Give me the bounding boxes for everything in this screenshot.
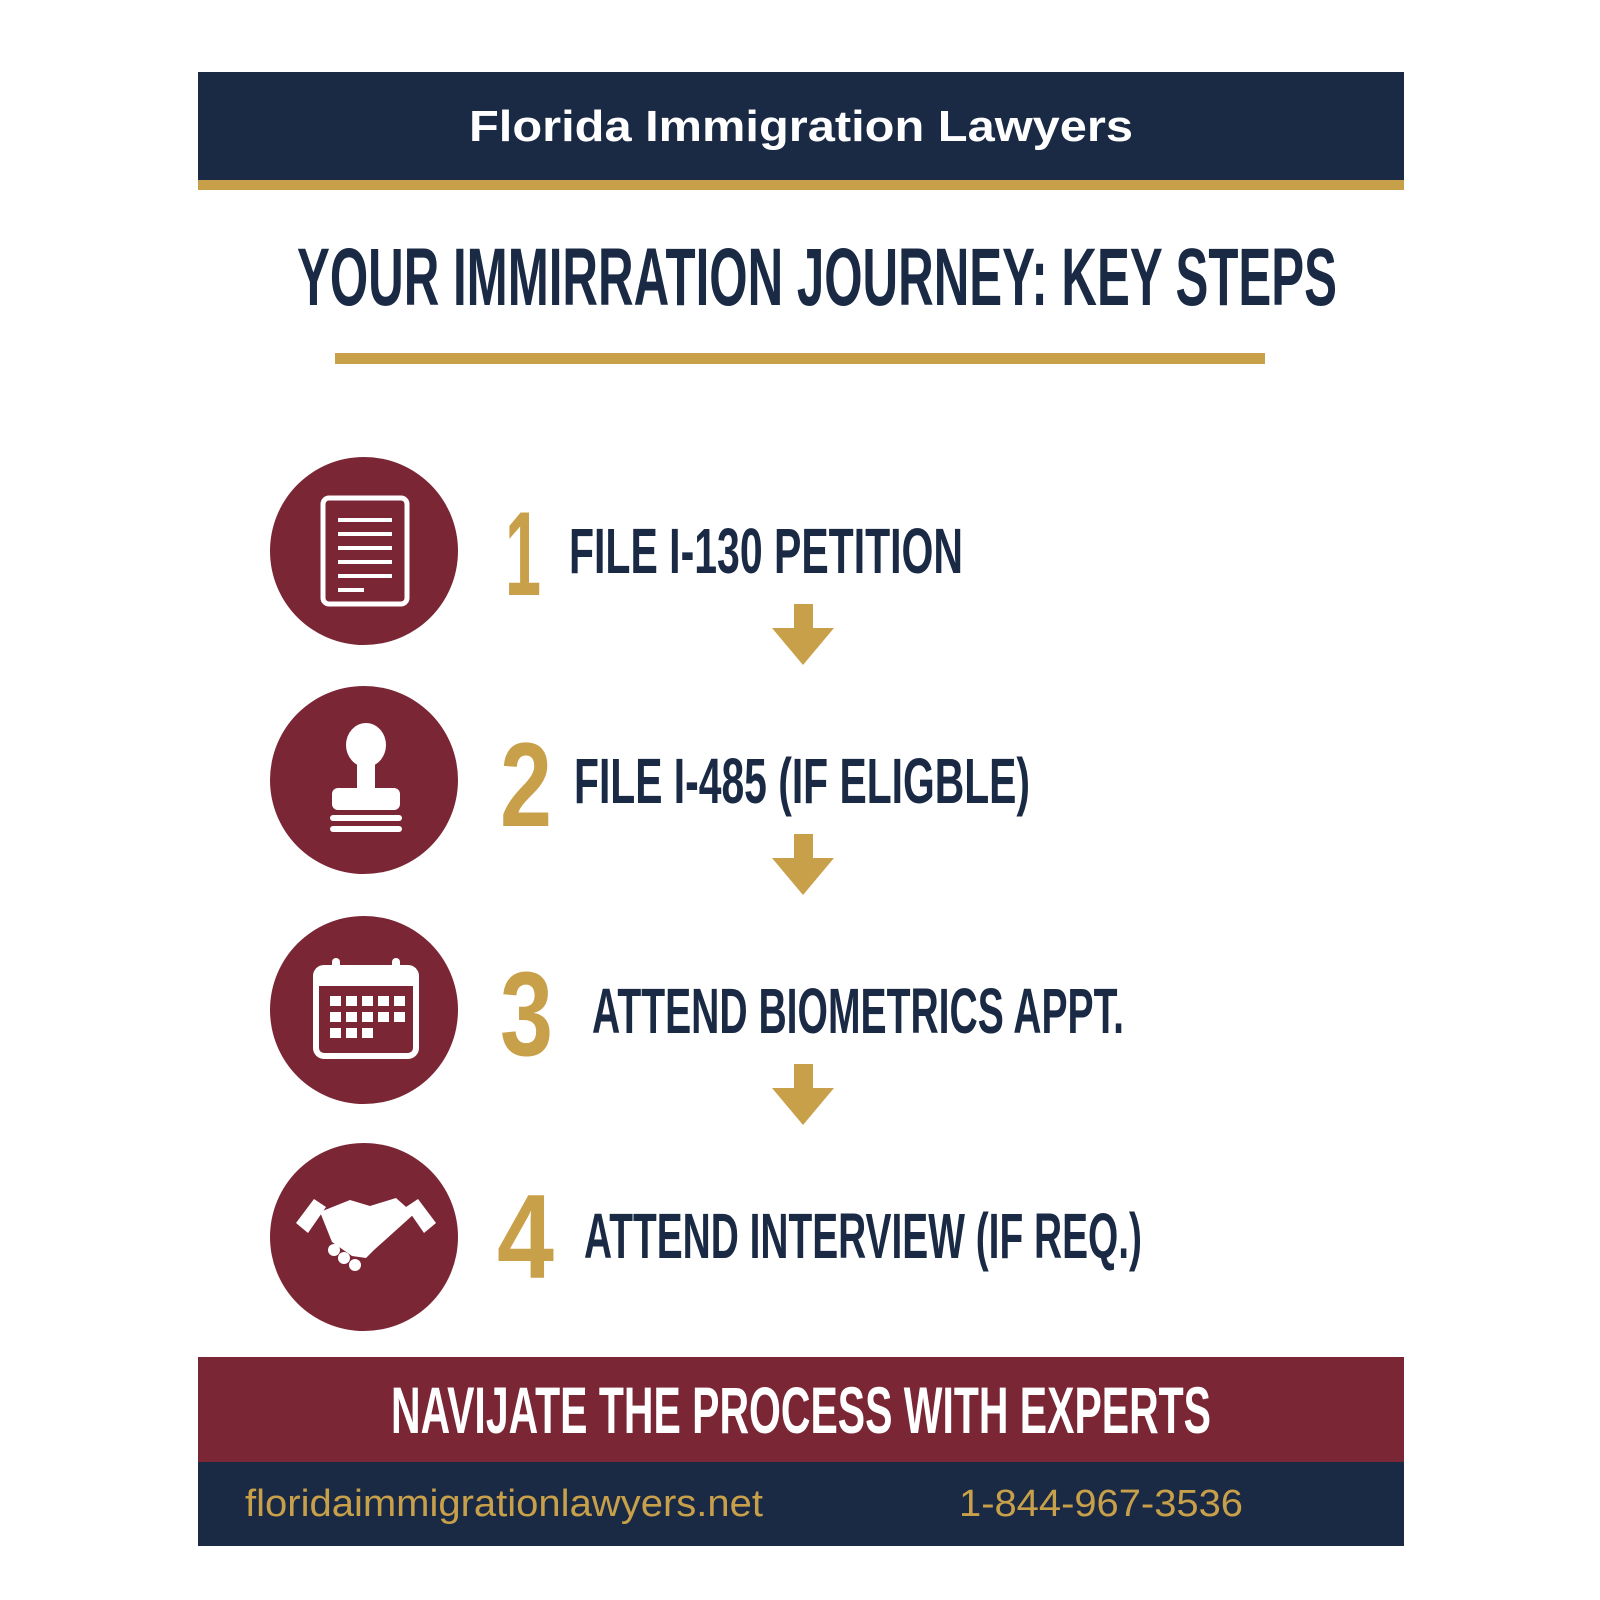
step 1: FILE I-130 PETITION [569,515,963,587]
step 4 [270,1143,1142,1331]
footer banner [198,1357,1404,1546]
step 1 [270,457,963,645]
arrow 3 [772,1064,834,1125]
step 2: 2 [500,718,552,852]
icon: handshake [296,1198,436,1271]
header banner [198,72,1404,190]
footer banner: floridaimmigrationlawyers.net [245,1483,763,1525]
step 3: 3 [500,947,553,1081]
icon: calendar [316,958,416,1056]
icon: document [323,498,407,604]
arrow 2 [772,834,834,895]
header banner: Florida Immigration Lawyers [469,102,1133,151]
step 3 [270,916,1124,1104]
arrow 1 [772,604,834,665]
step 2: FILE I-485 (IF ELIGBLE) [574,745,1030,817]
icon: stamp [330,723,402,832]
step 3: ATTEND BIOMETRICS APPT. [592,975,1124,1047]
step 2 [270,686,1030,874]
step 4: 4 [497,1170,554,1304]
title underline [335,353,1265,364]
step 1: 1 [505,487,541,621]
step 4: ATTEND INTERVIEW (IF REQ.) [584,1200,1142,1272]
footer banner: 1-844-967-3536 [959,1483,1243,1525]
